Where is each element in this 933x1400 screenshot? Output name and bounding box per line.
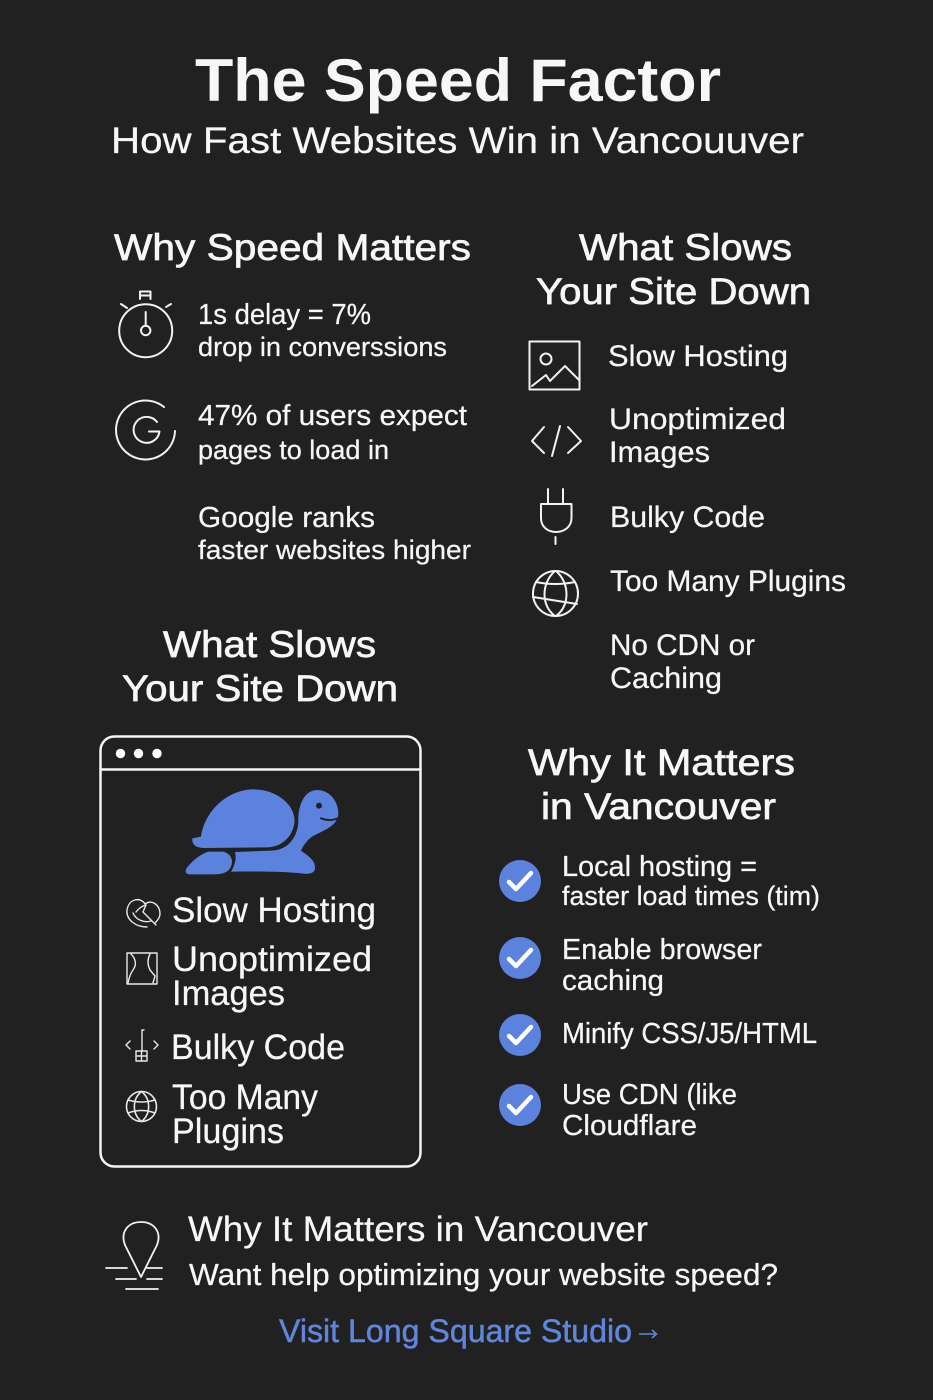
text: google ranks: Google ranks: [198, 502, 375, 534]
heading: why it matters: [528, 742, 795, 827]
text: unoptimized images: Images: [609, 436, 710, 469]
text: unoptimized images: [172, 940, 372, 1013]
icon: google G: [116, 400, 175, 459]
icon: hosting swirl: [127, 900, 160, 927]
text: google ranks: [198, 502, 471, 565]
text: too many plugins: [172, 1078, 318, 1151]
icon: arrow: [639, 1330, 656, 1338]
icon: check 2: [499, 937, 541, 979]
text: bulky code: Bulky Code: [610, 501, 765, 534]
link: visit long square studio: Visit Long Square Studio: [279, 1313, 632, 1349]
text: local hosting: [562, 851, 820, 911]
text: no cdn or caching: [610, 629, 755, 695]
browser frame: [100, 736, 420, 1166]
icon: globe: [126, 1092, 156, 1122]
title: The Speed Factor: [195, 47, 721, 114]
heading: why it matters: Why It Matters: [528, 742, 795, 783]
icon: stopwatch: [119, 292, 172, 357]
text: 1s delay: [198, 299, 447, 362]
text: use cdn: [562, 1079, 737, 1142]
icon: check 3: [499, 1014, 541, 1056]
icon: location pin: [106, 1222, 162, 1289]
text: want help: Want help optimizing your website speed?: [189, 1257, 778, 1292]
icon: turtle: [186, 789, 338, 874]
icon: code: [532, 426, 581, 456]
panel: why it matters in vancouver: [499, 742, 820, 1142]
panel: what slows your site down (right): [530, 227, 846, 695]
text: unoptimized images: Unoptimized: [609, 403, 786, 436]
icon: check 1: [499, 860, 541, 902]
text: 47 percent: pages to load in: [198, 435, 389, 465]
text: why it matters in vancouver: Why It Matters in Vancouver: [188, 1210, 648, 1249]
icon: image frame: [127, 953, 157, 984]
icon: globe: [533, 571, 578, 616]
text: bulky code: Bulky Code: [171, 1028, 345, 1067]
text: 1s delay: drop in converssions: [198, 332, 447, 362]
text: minify: Minify CSS/J5/HTML: [562, 1018, 817, 1050]
heading: why speed matters: Why Speed Matters: [114, 227, 471, 268]
text: unoptimized images: Images: [172, 974, 285, 1013]
heading: what slows your site down: Your Site Down: [536, 271, 811, 312]
text: enable browser caching: [562, 934, 762, 997]
icon: plug: [541, 489, 572, 544]
text: use cdn: Use CDN (like: [562, 1079, 737, 1111]
heading: what slows your site down (left): [122, 624, 398, 709]
text: local hosting: Local hosting =: [562, 851, 757, 883]
text: too many plugins: Too Many: [172, 1078, 318, 1117]
text: 47 percent: 47% of users expect: [198, 400, 467, 432]
heading: what slows your site down: What Slows: [579, 227, 792, 268]
icon: code plug: [126, 1030, 158, 1061]
text: too many plugins: Too Many Plugins: [610, 565, 846, 598]
text: use cdn: Cloudflare: [562, 1110, 697, 1142]
text: slow hosting: Slow Hosting: [172, 891, 376, 930]
text: too many plugins: Plugins: [172, 1112, 284, 1151]
text: no cdn or caching: Caching: [610, 662, 722, 695]
icon: image: [530, 342, 580, 390]
text: enable browser caching: Enable browser: [562, 934, 762, 966]
heading: what slows your site down: [536, 227, 811, 312]
text: 1s delay: 1s delay = 7%: [198, 299, 371, 331]
text: 47 percent: [198, 400, 467, 465]
panel: why speed matters: [114, 227, 471, 565]
text: unoptimized images: Unoptimized: [172, 940, 372, 979]
panel: browser window: [100, 736, 420, 1166]
footer call to action: [106, 1210, 778, 1349]
subtitle: How Fast Websites Win in Vancouuver: [111, 120, 804, 161]
text: slow hosting: Slow Hosting: [608, 340, 788, 373]
text: local hosting: faster load times (tim): [562, 881, 820, 911]
heading: what slows your site down (left): Your Site Down: [122, 668, 398, 709]
browser title bar: [101, 749, 420, 770]
text: no cdn or caching: No CDN or: [610, 629, 755, 662]
text: unoptimized images: [609, 403, 786, 469]
icon: check 4: [499, 1084, 541, 1126]
heading: why it matters: in Vancouver: [541, 786, 776, 827]
text: enable browser caching: caching: [562, 965, 664, 997]
heading: what slows your site down (left): What Slows: [163, 624, 376, 665]
text: google ranks: faster websites higher: [198, 535, 471, 565]
